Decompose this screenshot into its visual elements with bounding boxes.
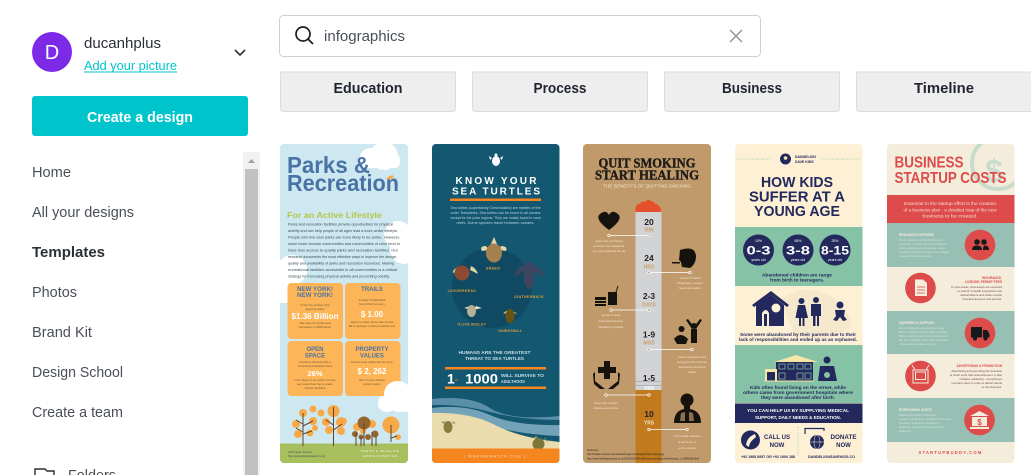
title: STARTUP COSTS bbox=[894, 170, 1006, 187]
title: KNOW YOUR bbox=[456, 176, 537, 187]
title bbox=[596, 158, 699, 180]
user name: ducanhplus bbox=[84, 36, 161, 52]
search text: infographics bbox=[324, 29, 405, 45]
statistic block: 1000 bbox=[465, 370, 498, 386]
icon: exercising people bbox=[674, 319, 702, 344]
row: equipment and supplies: Before adding equipment, expenses to bbox=[899, 334, 949, 338]
tab: business: Business bbox=[722, 81, 782, 97]
stat card: open space: more likely to be active 3 times bbox=[294, 378, 336, 382]
timeline labels bbox=[642, 217, 656, 426]
timeline labels: 2-3 bbox=[643, 291, 655, 301]
navy call to action band: SUPPORT, DAILY NEEDS & EDUCATION. bbox=[755, 415, 841, 421]
caption text: energy levels improve; bbox=[677, 360, 707, 364]
sidebar: account and navigation bbox=[32, 32, 260, 475]
folders item bbox=[35, 468, 116, 475]
row: advertising and promotion: to the business. bbox=[982, 385, 1002, 389]
statistic block bbox=[445, 367, 546, 389]
row: research expenses: business owners choose to hire market bbox=[899, 250, 949, 254]
icon: burger and drink bbox=[595, 286, 618, 306]
timeline labels: 1-9 bbox=[643, 330, 655, 340]
timeline labels: 24 bbox=[644, 253, 654, 263]
title: BUSINESS bbox=[894, 154, 964, 172]
stat card: new york bbox=[288, 283, 343, 339]
green band: age groups bbox=[735, 227, 863, 286]
red intro band: business to be created. bbox=[922, 214, 978, 218]
intro text: reefs. Some species travel between oceans. bbox=[456, 221, 535, 225]
tab: education bbox=[280, 72, 456, 112]
row: borrowing costs: BORROWING COSTS bbox=[899, 408, 932, 412]
row: borrowing costs: financing. bbox=[899, 429, 912, 433]
icon: document bbox=[915, 280, 927, 296]
icon: parents bbox=[796, 297, 821, 326]
icon: people bbox=[972, 239, 989, 250]
cloud over cards bbox=[378, 381, 402, 412]
intro paragraph: some lower-income communities and communities of color tend to bbox=[288, 242, 400, 246]
age circle: 3-8: 3-8 bbox=[786, 244, 810, 258]
tab: timeline bbox=[856, 72, 1031, 112]
label: hawksbill: HAWKSBILL bbox=[498, 329, 523, 333]
title: HOW KIDS bbox=[761, 174, 833, 191]
row: advertising and promotion: Advertising and promoting the business bbox=[951, 369, 1003, 373]
stat card: trails: found that for every bbox=[359, 302, 385, 306]
threat heading: HUMANS ARE THE GREATEST bbox=[458, 350, 531, 356]
age circle: 0-3: 0-3 bbox=[746, 244, 771, 258]
stat card: open space: recreational facilities were bbox=[298, 364, 333, 368]
header dotted lines bbox=[737, 158, 860, 160]
caption: Kids often found living on the street, while bbox=[750, 385, 847, 390]
caption text bbox=[593, 239, 707, 450]
timeline labels: 20 bbox=[644, 217, 654, 227]
panel: parks and recreation template bbox=[277, 142, 418, 464]
title underline bbox=[450, 198, 541, 201]
row: equipment and supplies bbox=[887, 311, 1015, 354]
background dollar coin bbox=[972, 137, 1024, 189]
dollar glyph: $ bbox=[985, 153, 1003, 189]
row: equipment and supplies: Every business type requires some bbox=[899, 326, 944, 330]
label: green: GREEN bbox=[486, 266, 500, 270]
stat card: property values bbox=[345, 341, 400, 396]
navy call to action band: YOU CAN HELP US BY SUPPLYING MEDICAL bbox=[747, 408, 849, 414]
stat card: open space: without facilities bbox=[304, 386, 326, 390]
caption text: levels normalize bbox=[679, 286, 701, 290]
timeline labels: 10 bbox=[644, 409, 654, 419]
donate block: DONATE bbox=[830, 435, 856, 441]
intro paragraph: have less access to quality parks and recreation facilities. Our bbox=[288, 248, 399, 252]
caption: Abandoned children are range bbox=[762, 272, 833, 278]
clouds bbox=[277, 142, 418, 412]
beach turtles bbox=[441, 421, 549, 450]
turtle diagram circle bbox=[452, 248, 532, 328]
cigarette body bbox=[636, 200, 662, 463]
panel: quit smoking template bbox=[583, 144, 711, 463]
timeline labels: 1-5 bbox=[643, 373, 655, 383]
caption text: disease and stroke bbox=[593, 406, 619, 410]
navy call to action band bbox=[735, 404, 863, 423]
icon: orphanage building bbox=[764, 355, 818, 381]
row: borrowing costs: two ways to acquire capital for a bbox=[899, 421, 941, 425]
navigation menu: Create a team bbox=[32, 405, 123, 421]
footer bar bbox=[432, 448, 560, 464]
stat card: new york: recreation in 2006 alone bbox=[299, 325, 331, 329]
timeline labels: DAYS bbox=[642, 302, 656, 308]
navigation menu: All your designs bbox=[32, 205, 134, 221]
divider dots bbox=[797, 427, 799, 456]
panel: business startup costs template bbox=[887, 137, 1024, 463]
tab: process bbox=[472, 72, 648, 112]
timeline labels: MOS bbox=[643, 340, 655, 346]
turtle: hawksbill bbox=[503, 309, 518, 323]
create a design button: Create a design bbox=[87, 110, 193, 126]
turtle: leatherback bbox=[515, 261, 543, 289]
stat card: trails: spent on trails, there was almost bbox=[350, 320, 394, 324]
icon: medical cross and hands bbox=[593, 361, 620, 389]
intro text bbox=[450, 206, 541, 225]
turtle: olive ridley bbox=[464, 305, 482, 317]
footer url: | MARINEWATCH.COM | bbox=[464, 454, 526, 458]
row: research expenses: before starting up a business. Some bbox=[899, 246, 946, 250]
icon: baby bbox=[833, 302, 847, 321]
title bbox=[894, 154, 1006, 187]
age circle: 8-15: 25% bbox=[831, 239, 839, 243]
stat card: open space: OPEN bbox=[306, 347, 324, 353]
row: research expenses bbox=[887, 223, 1015, 267]
timeline labels: YRS bbox=[644, 386, 655, 392]
background map shape bbox=[780, 290, 852, 338]
caption text: is same as of bbox=[678, 440, 696, 444]
sources bbox=[587, 449, 699, 460]
title bbox=[749, 174, 845, 220]
row: borrowing costs: business: equity financing and debt bbox=[899, 425, 944, 429]
stat card: new york: $1.36 Billion bbox=[292, 312, 339, 321]
intro paragraph: quality and availability of parks and recreation resources. Making bbox=[288, 262, 394, 266]
source note: Information Source: bbox=[288, 450, 313, 454]
caption text: a non-smoker bbox=[678, 446, 696, 450]
navigation menu: Photos bbox=[32, 285, 77, 301]
intro paragraph: Parks and recreation facilities provide opportunities for physical bbox=[288, 222, 393, 226]
green band: street bbox=[735, 345, 863, 403]
row: borrowing costs: Starting up and/or a business bbox=[899, 413, 937, 417]
age circle: 8-15 bbox=[820, 234, 850, 266]
icon: clear cross bbox=[730, 30, 742, 42]
call us block: +92 1988 8957 OR +92 1900 188 bbox=[741, 455, 795, 459]
title: START HEALING bbox=[595, 168, 699, 182]
sources: http://www.huffingtonpost.co.uk/2014/02/03/health-stop-smoking-effects/study_n_4089308.html bbox=[587, 458, 699, 460]
timeline labels: YRS bbox=[644, 420, 655, 426]
stat card: open space: SPACE bbox=[305, 354, 325, 360]
caption bbox=[743, 385, 854, 400]
title: Parks & bbox=[287, 152, 370, 178]
red intro band: of a business plan - a detailed map of the new bbox=[904, 208, 998, 212]
credit: ADMINISTRATION bbox=[363, 454, 398, 458]
icon: bank: $ bbox=[977, 418, 982, 427]
age circle: 8-15: years old bbox=[828, 258, 842, 262]
statistic block: 1 bbox=[447, 370, 455, 386]
caption text: lower risk of heart bbox=[594, 401, 618, 405]
intro paragraph: strategy for increasing physical activity and preventing obesity. bbox=[288, 274, 390, 278]
caption: from birth to teenagers. bbox=[770, 278, 824, 282]
panel: sea turtles template bbox=[432, 144, 560, 464]
intro paragraph: People who live near parks are more likely to be active. However, bbox=[288, 236, 400, 240]
stat card: property values: parks nearby bbox=[363, 382, 381, 386]
caption: Some were abandoned by their parents due to their bbox=[740, 332, 856, 337]
sidebar scrollbar bbox=[243, 152, 260, 475]
row: equipment and supplies: form of equipment and basic supplies. bbox=[899, 330, 948, 334]
row: insurance: In most areas, businesses are expected bbox=[951, 285, 1002, 289]
row: advertising and promotion: company does in order to attract clients bbox=[952, 381, 1003, 385]
title: QUIT SMOKING bbox=[598, 156, 696, 170]
stat card: open space bbox=[288, 341, 343, 396]
icon: truck bbox=[971, 327, 990, 340]
intro text: order Testudines. Sea turtles can be found in all oceans bbox=[450, 211, 541, 215]
tab: timeline: Timeline bbox=[914, 81, 974, 97]
caption text: disappears; oxygen bbox=[677, 281, 703, 285]
donate block: NOW bbox=[836, 443, 851, 449]
caption text: pressure are stabilized: bbox=[593, 244, 625, 248]
stat card: trails: TRAILS bbox=[361, 287, 383, 293]
stat card: new york: approximately bbox=[306, 307, 325, 311]
add picture link: Add your picture bbox=[84, 59, 177, 73]
icon: smoker head bbox=[672, 248, 696, 268]
row: insurance: INSURANCE, bbox=[982, 276, 1002, 280]
caption bbox=[762, 272, 833, 282]
threat heading: THREAT TO SEA TURTLES bbox=[465, 356, 525, 362]
user avatar bbox=[32, 32, 72, 72]
row: equipment and supplies: to be made to lease or to buy. bbox=[899, 342, 937, 346]
icon: television bbox=[912, 365, 929, 383]
age circle: 0-3: 10% bbox=[755, 239, 762, 243]
caption text: risk of heart disease bbox=[674, 434, 701, 438]
tab: education: Education bbox=[334, 81, 402, 97]
connector lines bbox=[605, 234, 693, 431]
tab: process: Process bbox=[534, 81, 586, 97]
row: insurance: to submit to health inspections and bbox=[957, 289, 1002, 293]
stat card: property values: Homes near parks sell for up to bbox=[351, 360, 393, 364]
label: loggerhead: LOGGERHEAD bbox=[448, 289, 476, 293]
row: research expenses: consumer market must be conducted bbox=[899, 242, 947, 246]
subtitle: THE BENEFITS OF QUITTING SMOKING bbox=[603, 184, 691, 188]
row: insurance: authorizations and obtain certain bbox=[960, 293, 1002, 297]
stat card: property values: PROPERTY bbox=[355, 347, 389, 353]
title: SEA TURTLES bbox=[452, 186, 540, 198]
row: insurance: business licenses and permits. bbox=[963, 297, 1002, 301]
row: research expenses: RESEARCH EXPENSES bbox=[899, 233, 934, 237]
stat card: property values: $ 2, 262 bbox=[358, 367, 387, 376]
row: advertising and promotion: includes marketing - everything a bbox=[960, 377, 1002, 381]
label: leatherback: LEATHERBACK bbox=[514, 295, 544, 299]
row: research expenses: research firms to perform. bbox=[899, 254, 932, 258]
caption text: easier bbox=[688, 370, 696, 374]
stat card: trails: A study in Nebraska bbox=[359, 298, 386, 302]
icon: lungs torso bbox=[674, 394, 701, 423]
source note: http://activelivingresearch.org/ bbox=[288, 454, 325, 458]
icon: pregnant woman bbox=[818, 356, 837, 381]
caption text: sense of taste bbox=[602, 313, 621, 317]
intro paragraph: activity and can help people of all ages lead a more active lifestyle. bbox=[288, 229, 398, 233]
age circle: 0-3 bbox=[743, 234, 774, 266]
navigation menu: Brand Kit bbox=[32, 325, 92, 341]
red intro band bbox=[887, 195, 1015, 223]
subtitle: For an Active Lifestyle bbox=[287, 210, 382, 220]
row: equipment and supplies: the list of startup costs, determine how bbox=[899, 338, 949, 342]
navigation menu: Design School bbox=[32, 365, 123, 381]
caption text: and smell improve; bbox=[598, 319, 624, 323]
stat card: trails: $ 1.00 bbox=[361, 310, 384, 319]
caption bbox=[739, 332, 857, 342]
red intro band: Essential to the startup effort is the creation bbox=[904, 201, 997, 206]
credit bbox=[361, 450, 398, 457]
icon: account dropdown chevron bbox=[235, 50, 245, 55]
statistic block: ADULTHOOD bbox=[501, 379, 525, 385]
stat card: new york: NEW YORK! bbox=[297, 292, 333, 299]
row: insurance bbox=[905, 273, 1002, 303]
icon: turtle logo bbox=[489, 154, 503, 166]
caption text: heart rate and blood bbox=[596, 239, 623, 243]
age circle: 3-8: years old bbox=[791, 258, 805, 262]
turtle: loggerhead bbox=[453, 266, 478, 280]
stat card: trails bbox=[345, 283, 400, 339]
row: advertising and promotion bbox=[905, 361, 1003, 391]
row: advertising and promotion: ADVERTISING & PROMOTION bbox=[956, 364, 1003, 368]
caption text: you stop polluting the air bbox=[593, 249, 625, 253]
title: SUFFER AT A bbox=[749, 188, 845, 206]
age circle: 3-8 bbox=[782, 234, 814, 266]
statistic block: WILL SURVIVE TO bbox=[501, 373, 544, 379]
stat card: property values: than homes without bbox=[359, 378, 385, 382]
icon: house bbox=[752, 291, 789, 326]
sources: http://media.nicorette.com/assets/images/quitting/quitting/smoking.jpg bbox=[587, 453, 665, 456]
stat card: open space: per week than the in areas bbox=[297, 382, 333, 386]
caption text: exercising becomes bbox=[679, 365, 706, 369]
stat card: trails: $3 in savings in direct medical cost bbox=[349, 324, 395, 328]
tab: business bbox=[664, 72, 840, 112]
call us block: NOW bbox=[770, 443, 785, 449]
row: advertising and promotion: is much more than advertisement. It also bbox=[950, 373, 1002, 377]
intro paragraph: research documents the most effective ways to improve the design, bbox=[288, 255, 397, 259]
caption: they were abandoned after birth. bbox=[761, 395, 835, 400]
row: borrowing costs bbox=[887, 398, 1015, 442]
icon: magnifier bbox=[296, 27, 313, 44]
stat card: new york: NEW YORK! bbox=[297, 286, 333, 293]
stat card: new york: In the city of New York bbox=[300, 303, 330, 307]
navigation menu: Home bbox=[32, 165, 71, 181]
logo: SAVE KIDS bbox=[795, 160, 814, 164]
logo: DANDELION bbox=[795, 155, 816, 159]
ground bbox=[280, 444, 408, 464]
footer url: STARTUPBUDDY.COM bbox=[918, 450, 983, 455]
intro text: except for the polar regions. They are mostly found in coral bbox=[450, 216, 541, 220]
icon: small bird bbox=[386, 175, 394, 180]
orange trees bbox=[292, 405, 401, 446]
age circle: 8-15: 8-15 bbox=[821, 244, 849, 258]
timeline labels: HRS bbox=[644, 264, 655, 270]
caption text: breathing is easier bbox=[599, 325, 623, 329]
age circle: 3-8: 65% bbox=[794, 239, 802, 243]
turtle: green bbox=[481, 237, 506, 262]
navigation menu: Templates bbox=[32, 245, 105, 261]
logo bbox=[780, 154, 816, 164]
source note bbox=[288, 451, 326, 458]
stat card: open space: Youths in districts with 1 bbox=[299, 360, 331, 364]
call us block bbox=[741, 430, 795, 459]
intro paragraph bbox=[288, 222, 400, 278]
threat heading bbox=[458, 351, 530, 360]
icon: heart bbox=[598, 212, 620, 230]
user avatar: D bbox=[45, 42, 59, 64]
title bbox=[288, 156, 398, 191]
intro text: Sea turtles (superfamily Chelonioidea) are reptiles of the bbox=[450, 206, 541, 210]
caption text: smoker's breath bbox=[679, 276, 701, 280]
title: YOUNG AGE bbox=[754, 203, 840, 220]
row: equipment and supplies: EQUIPMENT & SUPPLIES bbox=[899, 321, 934, 325]
caption: others came from government hospitals where bbox=[743, 390, 854, 395]
sources: Source(s): bbox=[587, 449, 599, 452]
stat card: property values: VALUES bbox=[360, 354, 384, 360]
create a design button bbox=[32, 96, 248, 136]
donate block: DANDELIONSAVEKIDS.CO bbox=[808, 455, 856, 459]
timeline labels: MIN bbox=[644, 228, 654, 234]
title: Recreation bbox=[287, 170, 399, 196]
caption text: blood circulation and bbox=[678, 355, 706, 359]
panel: how kids suffer template bbox=[735, 144, 863, 463]
row: research expenses: Good research of the industry and bbox=[899, 238, 943, 242]
call us block: CALL US bbox=[764, 435, 790, 441]
stat card: new york: was saved in parks and bbox=[299, 321, 331, 325]
waves and beach bbox=[432, 398, 560, 420]
credit: PARKS & WILDLIFE bbox=[361, 449, 399, 453]
row: borrowing costs: requires an infusion of capital. There are bbox=[899, 417, 951, 421]
category tabs bbox=[280, 72, 1031, 112]
search bar bbox=[280, 16, 760, 56]
donate block bbox=[805, 428, 856, 459]
intro paragraph: recreational facilities accessible in all communities is a critical bbox=[288, 268, 397, 272]
title bbox=[452, 177, 540, 194]
age circle: 0-3: years old bbox=[751, 258, 766, 262]
navigation menu bbox=[32, 165, 134, 421]
caption: lack of responsibilities and ended up as an orphaned. bbox=[739, 337, 857, 342]
row: insurance: LICENSE, PERMIT FEES bbox=[965, 280, 1002, 284]
statistic block: in bbox=[455, 377, 459, 382]
label: olive ridley: OLIVE RIDLEY bbox=[458, 322, 487, 326]
stat card: open space: 26% bbox=[307, 369, 323, 378]
